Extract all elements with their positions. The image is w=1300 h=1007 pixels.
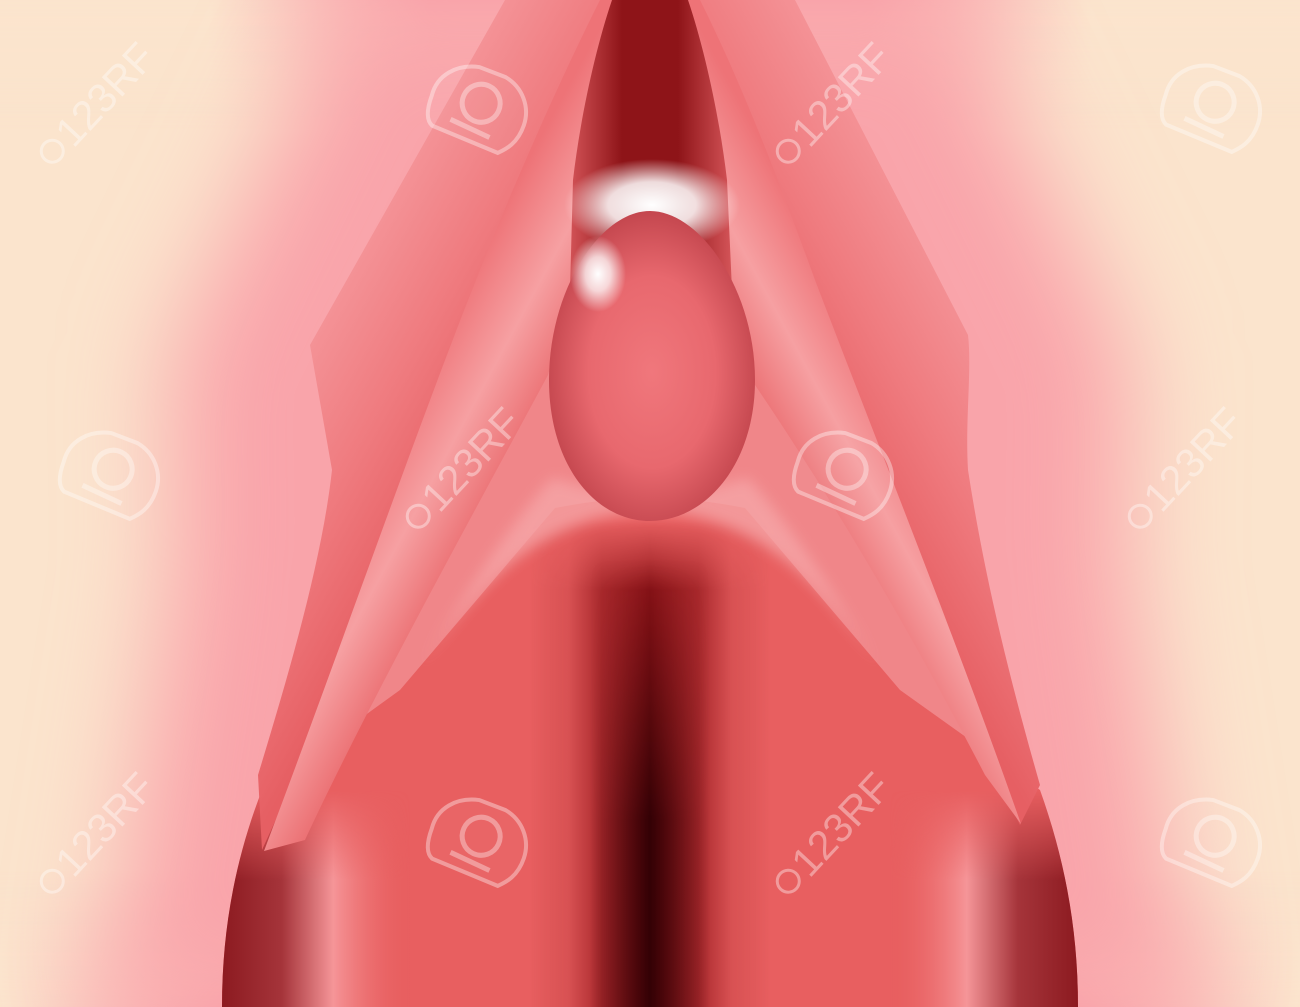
- central dark channel: [545, 0, 755, 330]
- watermark row 1: [28, 34, 1273, 175]
- watermark row 2: [52, 399, 1252, 540]
- under-fold fill: [260, 360, 1040, 800]
- lower crescent around oval: [420, 478, 880, 670]
- central column: [546, 526, 754, 1007]
- outer fold: left: [258, 0, 610, 850]
- inner fold: right: [688, 0, 1021, 824]
- watermark row 3: [28, 764, 1273, 905]
- body side shading: [222, 790, 1078, 1007]
- central oval: [549, 211, 755, 521]
- oval highlight: [570, 236, 626, 312]
- central column core: [594, 578, 706, 1007]
- inner fold: left: [264, 0, 612, 851]
- background bottom band: [28, 922, 1272, 1007]
- outer fold: right: [690, 0, 1040, 825]
- lower body: [222, 498, 1078, 1007]
- background top band: [235, 0, 1066, 70]
- white glow above oval: [564, 159, 740, 251]
